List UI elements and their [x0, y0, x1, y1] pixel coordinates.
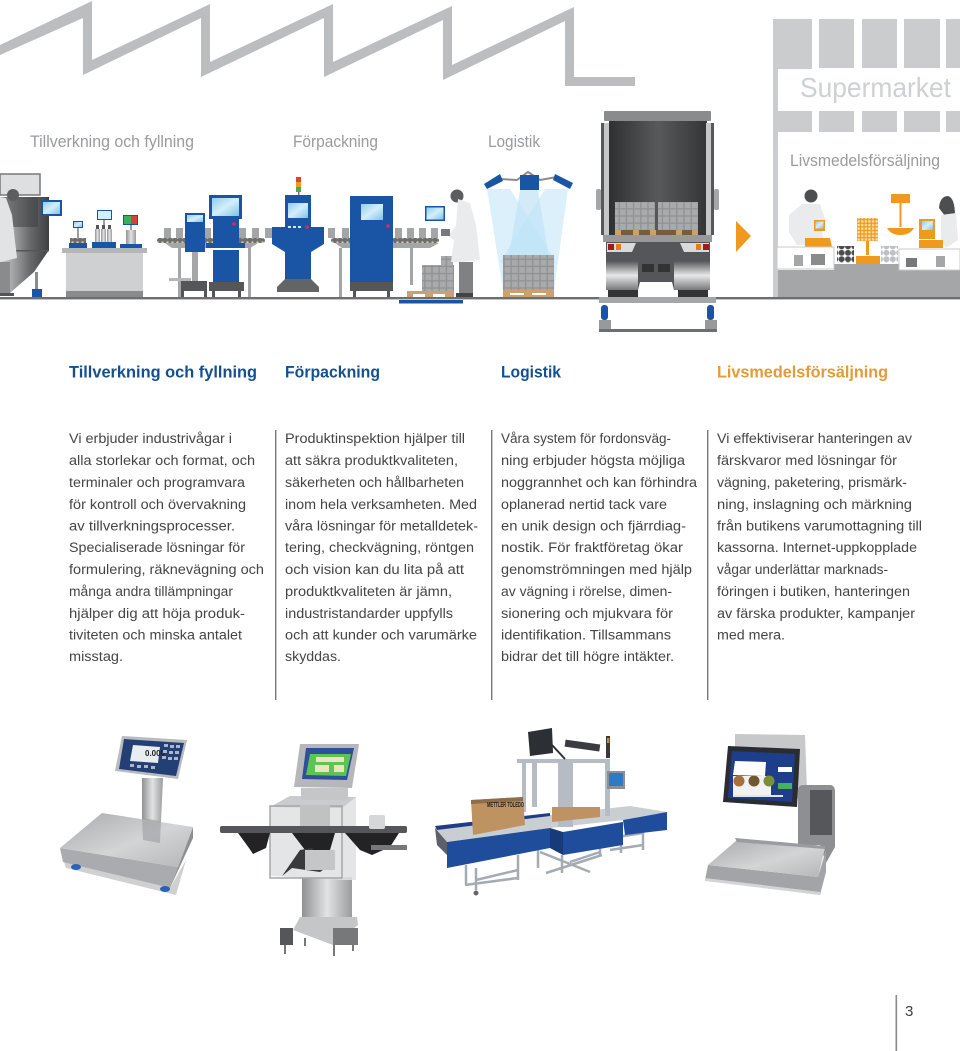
text column 3 — [501, 431, 697, 665]
text column 1: för kontroll och övervakning — [69, 497, 246, 513]
text column 2: tering, checkvägning, röntgen — [285, 540, 474, 556]
heading row: Livsmedelsförsäljning — [717, 362, 888, 382]
heading row — [69, 362, 888, 382]
text column 3: noggrannhet och kan förhindra — [501, 475, 697, 491]
product: bench scale with terminal: 0.000 — [145, 749, 166, 758]
cargo — [615, 202, 655, 230]
white counter left — [777, 247, 834, 269]
wheels — [606, 261, 638, 290]
white counter right — [899, 249, 960, 270]
text column 4: med mera. — [717, 628, 785, 644]
page number divider — [896, 995, 897, 1051]
hopper with operator — [0, 174, 62, 297]
text column 1: terminaler och programvara — [69, 475, 245, 491]
text column 1: tiviteten och minska antalet — [69, 628, 242, 644]
scale: bottles — [92, 210, 116, 248]
text column 3: identifikation. Tillsammans — [501, 628, 671, 644]
truck rear view — [596, 111, 719, 297]
text column 2: att säkra produktkvaliteten, — [285, 453, 458, 469]
hanging scale — [891, 194, 910, 203]
produce and scale — [837, 246, 854, 263]
text column 4: föringen i butiken, hanteringen — [717, 584, 910, 600]
touch screen — [294, 744, 359, 788]
text column 4 — [717, 431, 922, 644]
text column 4: vågar underlättar marknads- — [717, 562, 888, 578]
text column 4: av färska produkter, kampanjer — [717, 606, 915, 622]
text column 2: och att kunder och varumärke — [285, 628, 477, 644]
stage labels: Livsmedelsförsäljning — [790, 151, 940, 170]
heading row: Förpackning — [285, 362, 380, 382]
metal detector with signal tower — [272, 177, 324, 292]
text column 3: av vägning i rörelse, dimen- — [501, 584, 672, 600]
text column 4: från butikens varumottagning till — [717, 518, 922, 534]
text column 4: ning, inslagning och märkning — [717, 497, 912, 513]
clerk right — [919, 196, 958, 248]
text column 3: bidrar det till högre intäkter. — [501, 649, 674, 665]
text column 2: Produktinspektion hjälper till — [285, 431, 465, 447]
text column 1: hjälper dig att höja produk- — [69, 606, 245, 622]
carton pallet with operator — [399, 190, 480, 304]
text column 3: en unik design och fjärrdiag- — [501, 518, 686, 534]
vision system lights — [484, 172, 573, 297]
page number: 3 — [905, 1003, 913, 1020]
stage labels: Förpackning — [293, 132, 378, 151]
stage labels: Tillverkning och fyllning — [30, 132, 194, 151]
text column 4: Vi effektiviserar hanteringen av — [717, 431, 913, 447]
text column 3: sionering och mjukvara för — [501, 606, 673, 622]
heading row: Tillverkning och fyllning — [69, 362, 257, 382]
text column 2: industristandarder uppfylls — [285, 606, 453, 622]
supermarket sign: Supermarket — [800, 72, 951, 103]
heading row: Logistik — [501, 362, 561, 382]
text column 2: och vision kan du lita på att — [285, 562, 464, 578]
text column 2: inom hela verksamheten. Med — [285, 497, 477, 513]
gantry — [517, 759, 610, 827]
weighing table with three scales — [62, 210, 147, 297]
text column 1: av tillverkningsprocesser. — [69, 518, 235, 534]
scale: small — [69, 221, 87, 248]
monitor — [41, 200, 62, 216]
stage labels: Logistik — [488, 132, 540, 151]
product: checkweigher — [220, 744, 407, 956]
orange arrow — [736, 221, 751, 252]
conveyor 2 with blue cabinet — [328, 196, 445, 297]
floor line — [0, 297, 960, 299]
text column 1: Vi erbjuder industrivågar i — [69, 431, 232, 447]
text column 3: genomströmningen med hjälp — [501, 562, 692, 578]
text column 3: nostik. För fraktföretag ökar — [501, 540, 683, 556]
product: bench scale with terminal — [60, 736, 193, 895]
product: retail scale with touch screen — [705, 734, 835, 895]
text column 3: Våra system för fordonsväg- — [501, 431, 671, 447]
text column 2: produktkvaliteten är jämn, — [285, 584, 452, 600]
products — [164, 228, 272, 238]
text column 2: säkerheten och hållbarheten — [285, 475, 464, 491]
pallet stack — [503, 255, 554, 290]
chassis — [606, 242, 710, 290]
monitor — [425, 206, 445, 221]
text column 4: vägning, paketering, prismärk- — [717, 475, 907, 491]
scanner — [528, 728, 553, 756]
product: dimensioning conveyor — [435, 728, 667, 896]
text column 1 — [69, 431, 264, 665]
text column 3: oplanerad nertid tack vare — [501, 497, 667, 513]
supermarket building — [773, 19, 960, 297]
factory roof zigzag — [0, 1, 635, 86]
text column 2: skyddas. — [285, 649, 341, 665]
text column 2: våra lösningar för metalldetek- — [285, 518, 478, 534]
floor frame — [465, 832, 643, 890]
stage labels — [30, 132, 940, 170]
text column 4: färskvaror med lösningar för — [717, 453, 897, 469]
cartons — [471, 797, 525, 835]
lamps — [500, 172, 557, 180]
screen — [723, 746, 800, 807]
underside — [238, 833, 270, 854]
text column 1: misstag. — [69, 649, 123, 665]
text column 2 — [285, 431, 478, 665]
text column 1: många andra tillämpningar — [69, 584, 233, 600]
text column 4: kassorna. Internet-uppkopplade — [717, 540, 917, 556]
text column 1: Specialiserade lösningar för — [69, 540, 245, 556]
blue side panels — [447, 828, 550, 868]
text column 1: formulering, räknevägning och — [69, 562, 264, 578]
product: dimensioning conveyor: METTLER TOLEDO — [487, 802, 524, 809]
counter — [778, 270, 960, 297]
text column 3: ning erbjuder högsta möjliga — [501, 453, 685, 469]
conveyor bed — [435, 806, 667, 842]
weighbridge platform — [599, 297, 717, 332]
text column 1: alla storlekar och format, och — [69, 453, 255, 469]
column dividers — [275, 430, 708, 700]
scale: column — [120, 215, 142, 248]
terminal — [115, 736, 187, 779]
retail counter scene — [777, 190, 960, 297]
conveyor 1 with checkweigher — [157, 195, 272, 297]
clerk left — [789, 190, 832, 247]
